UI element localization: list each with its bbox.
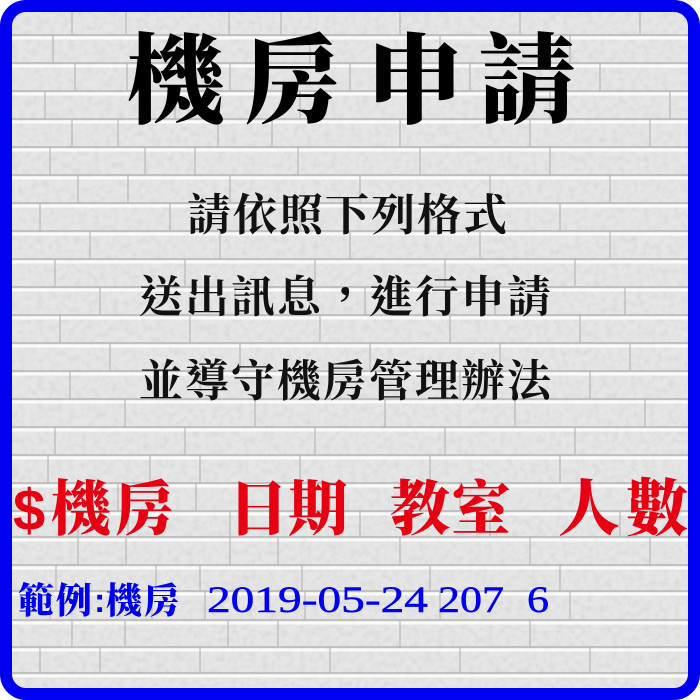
example line in blue: 2019-05-24 [207,580,428,621]
format line in red [13,459,688,548]
format line in red: 教室 [390,462,511,548]
example line in blue: 機房 [106,573,180,624]
title: 機房申請 [127,3,576,144]
example line in blue: : [94,582,105,620]
example line in blue [18,573,549,624]
format line in red: 日期 [228,462,348,548]
example line in blue: 6 [527,580,549,621]
instruction line 2: 送出訊息，進行申請 [139,261,551,325]
format line in red: 人數 [558,459,688,548]
format line in red: $ [13,478,45,543]
instruction line 3: 並導守機房管理辦法 [139,345,554,409]
format line in red: 機房 [51,462,175,548]
example line in blue: 範例 [18,573,92,624]
example line in blue: 207 [438,580,504,621]
instruction line 1: 請依照下列格式 [187,179,507,243]
